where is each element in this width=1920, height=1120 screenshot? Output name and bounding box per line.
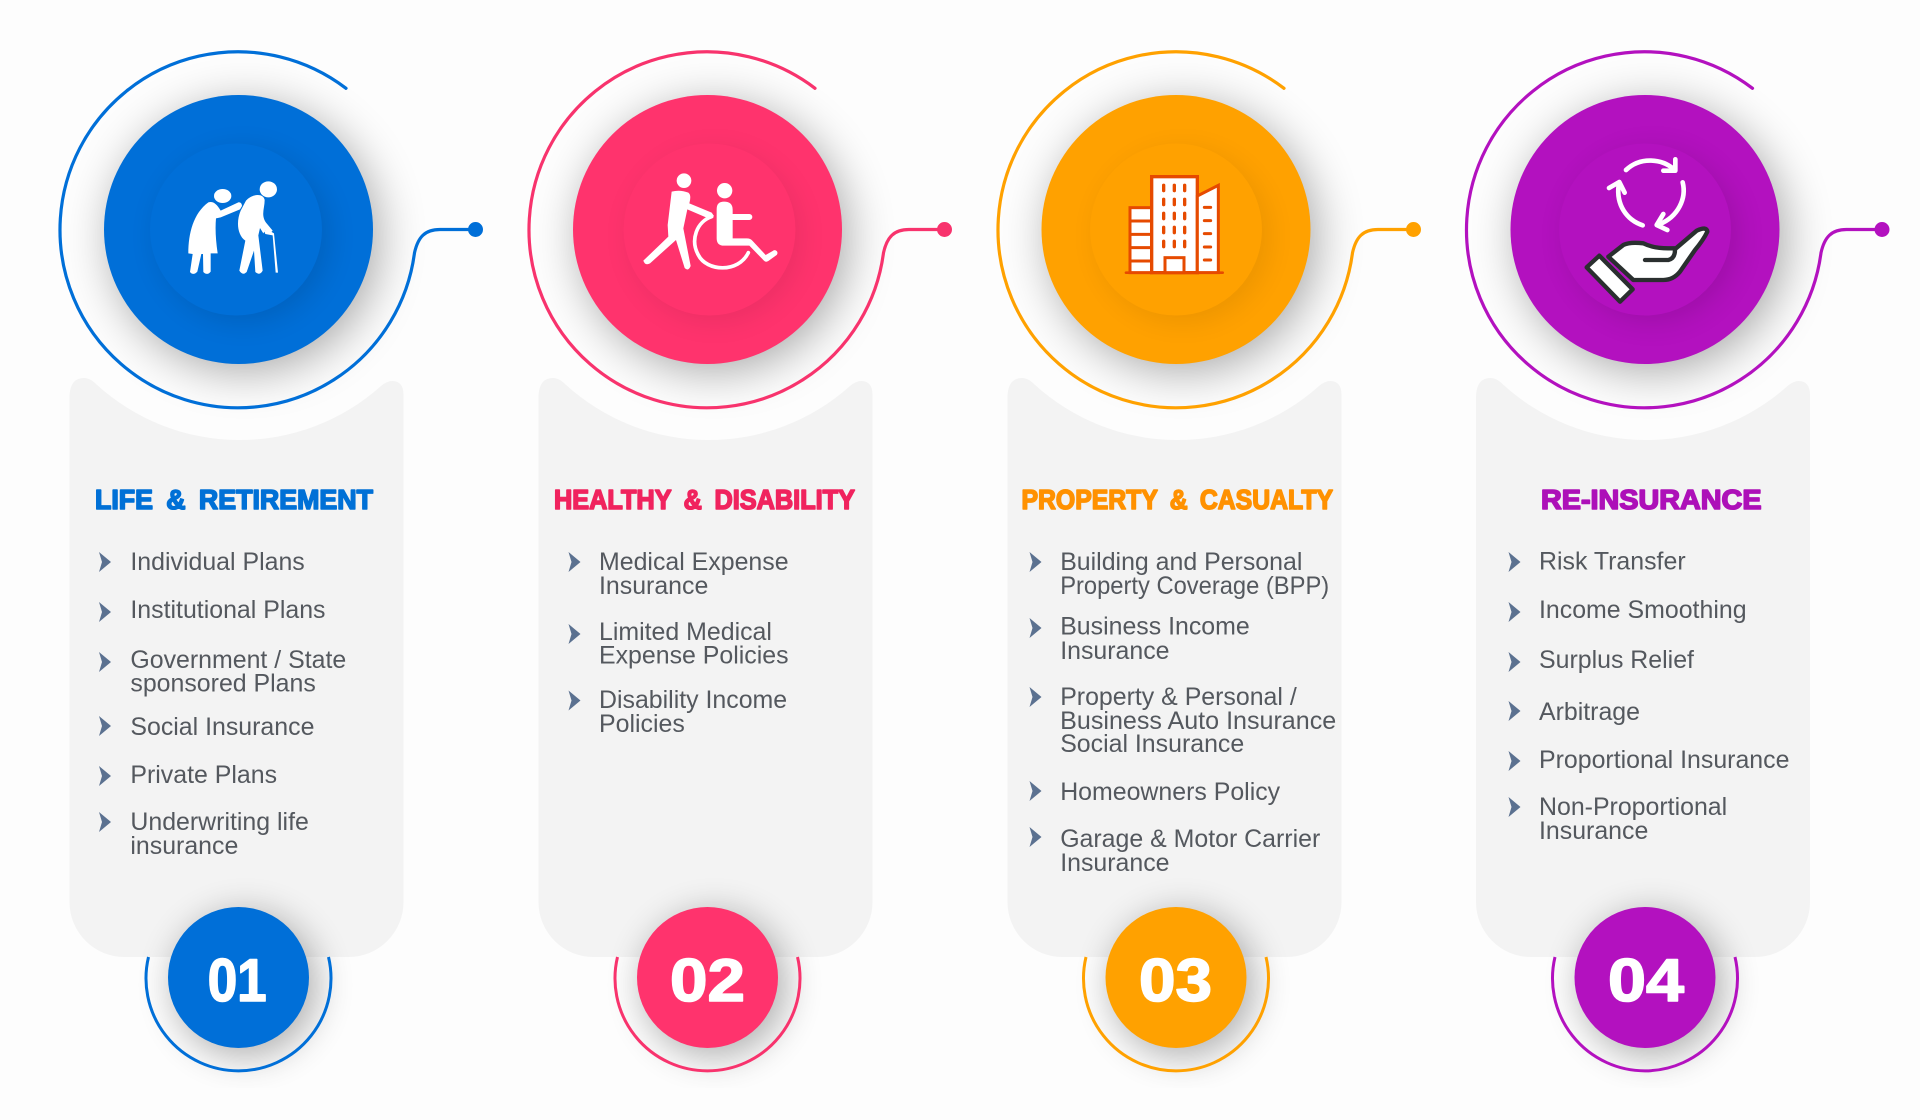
column 4: re-insurance [1466,52,1890,1071]
item [1030,548,1329,600]
heading: property & casualty: PROPERTY & CASUALTY [1022,484,1333,515]
item: Government / State [130,646,346,674]
badge: 01: 01 [208,947,267,1014]
badge: 02 [615,907,800,1071]
item: Insurance [1539,817,1648,845]
heading: healthy & disability: HEALTHY & DISABILITY [554,484,855,515]
item: Homeowners Policy [1060,778,1281,806]
item: Garage & Motor Carrier [1060,825,1320,853]
list: healthy & disability items [568,548,789,738]
panel: healthy & disability card [538,378,872,957]
icon: hand with cycle arrows [1587,159,1707,302]
item: Policies [599,710,685,738]
item [568,618,789,670]
item: Property Coverage (BPP) [1060,572,1329,600]
connector dot [468,222,483,237]
item: Income Smoothing [1539,596,1747,624]
badge: 04 [1552,907,1738,1071]
list: property & casualty items [1030,548,1336,877]
badge: 04: 04 [1608,947,1685,1014]
panel: life & retirement card [70,378,404,957]
column 3: property & casualty [998,52,1421,1071]
item: insurance [130,832,238,860]
inner circle [1090,144,1262,316]
main circle [1510,95,1780,364]
inner circle [150,144,322,316]
item: Insurance [1060,849,1170,877]
top circle with spiral ring [1466,52,1890,408]
list: re-insurance items [1508,547,1789,845]
top circle with spiral ring [998,52,1421,408]
connector dot [1406,222,1421,237]
badge: 03 [1084,907,1268,1071]
icon: office buildings [1126,177,1223,273]
item [1030,825,1320,877]
inner circle [624,144,796,316]
item: Proportional Insurance [1539,746,1789,774]
item: Private Plans [130,761,277,789]
item: Building and Personal [1060,548,1302,576]
item: Medical Expense [599,548,789,576]
badge: 03: 03 [1139,947,1212,1014]
item: Limited Medical [599,618,772,646]
top circle with spiral ring [60,52,483,408]
connector dot [1874,222,1890,237]
item: Underwriting life [130,808,309,836]
heading: life & retirement: LIFE & RETIREMENT [95,484,373,515]
top circle with spiral ring [529,52,952,408]
item [1030,612,1250,665]
item: Non-Proportional [1539,793,1727,821]
item: Insurance [599,572,708,600]
item [1508,793,1727,845]
main circle [1042,95,1310,364]
item: Arbitrage [1539,698,1640,726]
heading: re-insurance: RE-INSURANCE [1541,484,1762,515]
item: Institutional Plans [130,596,325,624]
item [99,646,346,698]
column 2: healthy & disability [529,52,952,1071]
item: Business Auto Insurance [1060,707,1336,735]
item: sponsored Plans [130,670,316,698]
main circle [573,95,842,364]
item: Business Income [1060,612,1250,640]
icon: elderly couple [188,181,278,274]
column 1: life & retirement [60,52,483,1071]
item: Expense Policies [599,642,789,670]
panel: property & casualty card [1008,378,1342,957]
badge: 01 [146,907,331,1071]
item: Insurance [1060,637,1170,665]
item [568,548,789,600]
item: Risk Transfer [1539,547,1686,575]
item: Disability Income [599,686,787,714]
badge: 02: 02 [670,947,745,1014]
inner circle [1559,144,1731,316]
item: Social Insurance [130,713,314,741]
list: life & retirement items [99,548,346,860]
item: Property & Personal / [1060,683,1297,711]
connector dot [937,222,952,237]
item [99,808,309,860]
item: Individual Plans [130,548,305,576]
item: Social Insurance [1060,730,1244,758]
icon: wheelchair with carer [643,173,777,269]
item: Surplus Relief [1539,646,1694,674]
panel: re-insurance card [1476,378,1810,957]
item [568,686,787,738]
main circle [104,95,373,364]
item [1030,683,1336,758]
